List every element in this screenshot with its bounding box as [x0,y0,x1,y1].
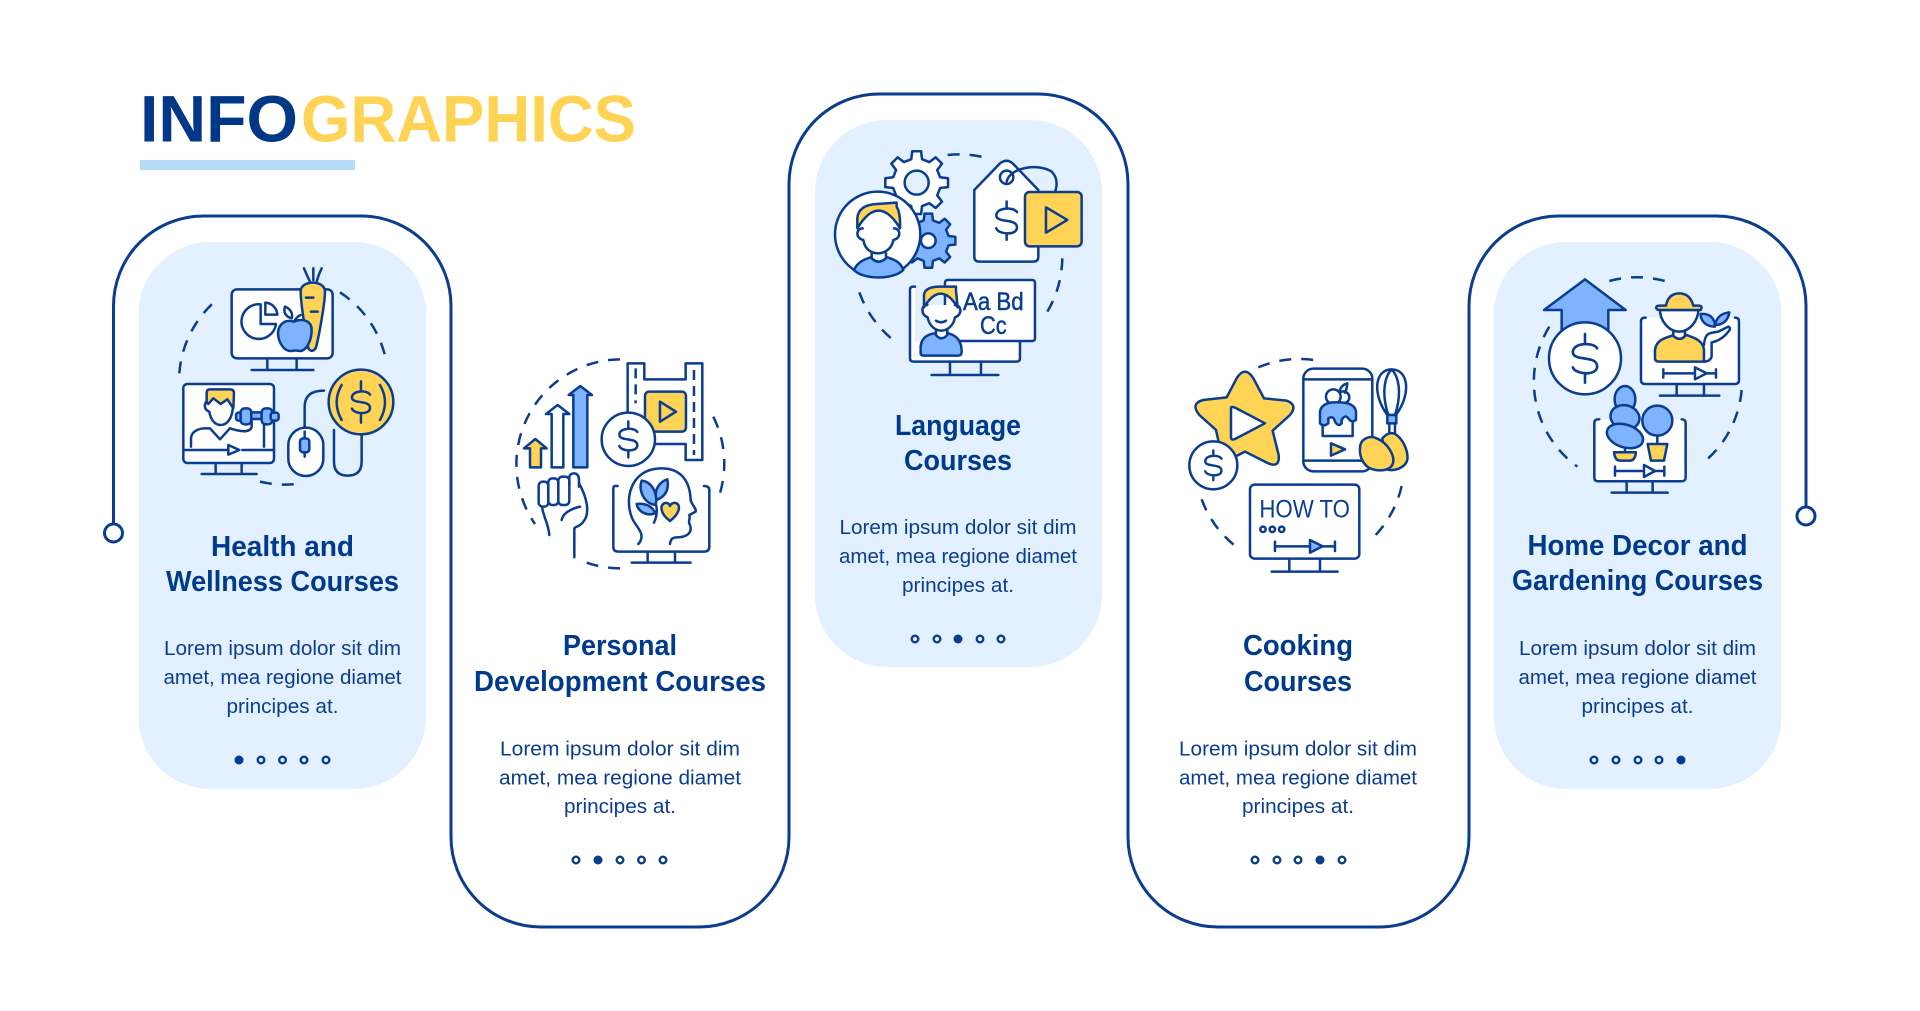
text: language: principes at. [902,574,1014,597]
text: language: Lorem ipsum dolor sit dim [840,516,1076,539]
pagination dots 4 [1252,856,1345,864]
heading: health and wellness: Wellness Courses [166,566,399,598]
text: home decor and gardening: amet, mea regione diamet [1518,666,1757,689]
panel backgrounds and connecting outline [104,94,1815,927]
heading: language: Courses [904,445,1012,477]
text: health and wellness: Lorem ipsum dolor sit dim [164,637,401,660]
text: personal development [499,738,741,818]
heading: personal development: Personal [563,630,677,662]
icon: cooking: HOW TO [1259,495,1350,523]
title: GRAPHICS [301,82,636,156]
heading: home decor and gardening: Home Decor and [1528,530,1748,562]
icon: language [835,151,1082,375]
title [140,82,636,156]
title: INFO [140,82,298,156]
text: language [839,516,1077,597]
heading: health and wellness: Health and [211,531,354,563]
title underline [140,160,355,170]
text: home decor and gardening: principes at. [1582,695,1694,718]
text: personal development: Lorem ipsum dolor sit dim [500,738,740,760]
text: home decor and gardening: Lorem ipsum dolor sit dim [1519,637,1756,660]
text: language: amet, mea regione diamet [839,545,1077,568]
panel: health and wellness [164,268,402,764]
heading: personal development: Development Courses [474,666,766,698]
text: cooking: principes at. [1242,795,1354,818]
heading: language [895,410,1021,477]
icon: home decor and gardening [1534,277,1742,493]
text: personal development: principes at. [564,795,676,818]
text: home decor and gardening [1518,637,1757,718]
text: health and wellness: principes at. [226,695,338,718]
heading: health and wellness [166,531,399,598]
heading: home decor and gardening [1512,530,1763,597]
icon: language: Aa Bd [963,288,1024,316]
text: personal development: amet, mea regione diamet [499,766,741,790]
heading: personal development [474,630,766,698]
icon: cooking [1189,359,1407,572]
pagination dots 2 [573,856,666,864]
icon: personal development [516,359,724,568]
heading: cooking [1243,630,1353,698]
text: cooking [1179,738,1417,818]
text: cooking: amet, mea regione diamet [1179,766,1417,790]
panel: home decor and gardening [1512,277,1763,764]
panel: personal development [474,359,766,864]
pagination dots 1 [234,756,329,764]
text: cooking: Lorem ipsum dolor sit dim [1179,738,1417,760]
heading: language: Language [895,410,1021,442]
text: health and wellness [164,637,402,718]
heading: cooking: Courses [1244,666,1352,698]
pagination dots 5 [1591,756,1686,764]
heading: cooking: Cooking [1243,630,1353,662]
panel: language [835,151,1082,644]
text: health and wellness: amet, mea regione diamet [164,666,402,689]
icon: language: Cc [980,312,1007,340]
icon: health and wellness [179,268,393,485]
panel: cooking [1179,359,1417,864]
heading: home decor and gardening: Gardening Courses [1512,565,1763,597]
pagination dots 3 [912,634,1004,644]
